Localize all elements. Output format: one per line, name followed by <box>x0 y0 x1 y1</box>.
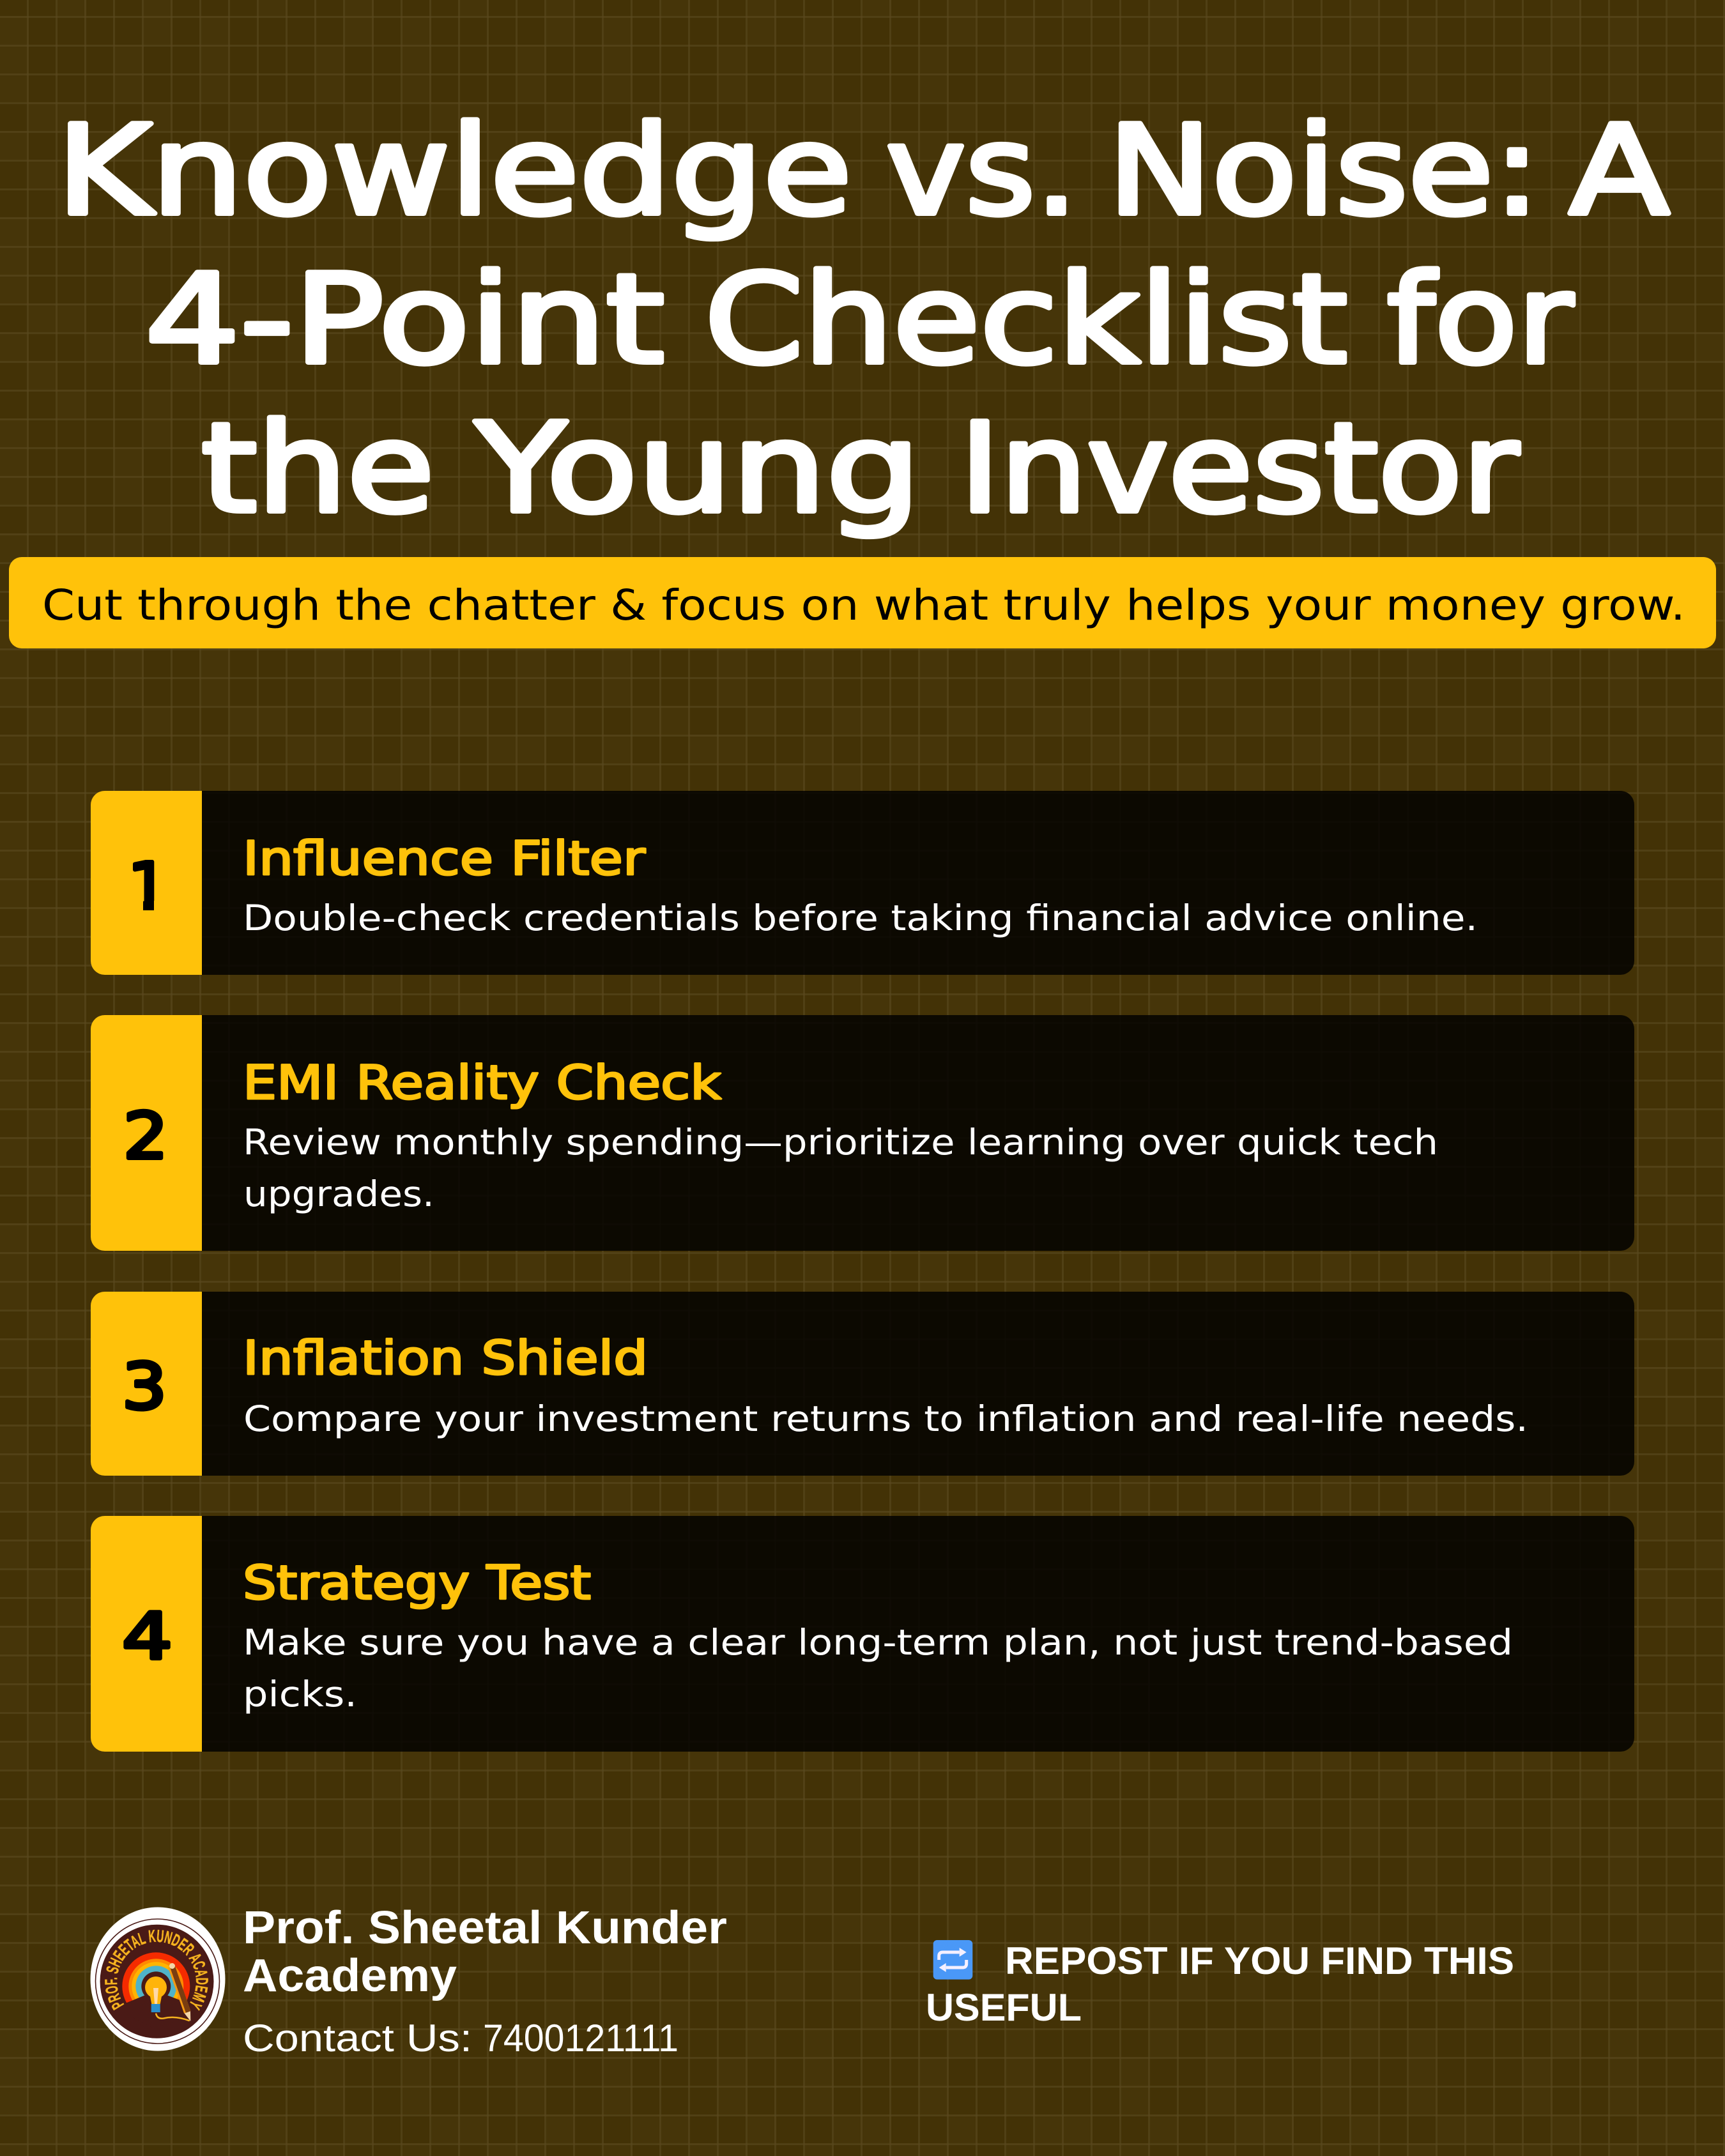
panel: checklist item 3: Compare your investment returns to inflation and real-life needs. <box>243 1398 1528 1439</box>
icon: repost <box>933 1940 972 1980</box>
panel: checklist item 1: 1 <box>128 849 169 924</box>
panel: checklist item 3: 3 <box>122 1349 167 1424</box>
icon: academy logo: PROF. SHEETAL KUNDER ACADEMY <box>105 1929 208 2011</box>
panel: checklist item 2: 2 <box>123 1099 168 1174</box>
panel: checklist item 3 <box>91 1292 1634 1476</box>
title <box>57 99 1669 540</box>
title: Noise: <box>1108 99 1540 243</box>
repost call to action: REPOST IF YOU FIND THIS <box>1005 1939 1514 1982</box>
title: for <box>1387 248 1574 392</box>
icon: academy logo <box>91 1908 225 2051</box>
panel: checklist item 4: Strategy Test <box>243 1556 591 1610</box>
panel: checklist item 2: EMI Reality Check <box>243 1056 722 1110</box>
academy name and contact <box>243 1902 727 2060</box>
panel: checklist item 4: picks. <box>243 1674 357 1715</box>
panel: checklist item 2: Review monthly spending—prioritize learning over quick tech <box>243 1122 1438 1163</box>
academy name and contact: Prof. Sheetal Kunder <box>243 1902 727 1953</box>
panel: checklist item 3: Inflation Shield <box>243 1331 648 1386</box>
academy name and contact: 7400121111 <box>483 2017 678 2060</box>
panel: checklist item 2: upgrades. <box>243 1174 434 1214</box>
title: Young <box>475 397 921 540</box>
title: vs. <box>886 99 1078 243</box>
repost call to action <box>926 1939 1514 2029</box>
panel: checklist item 1 <box>91 791 1634 975</box>
academy name and contact: Contact Us: <box>243 2017 472 2060</box>
title: the <box>201 397 434 540</box>
panel: checklist item 4: Make sure you have a clear long-term plan, not just trend-based <box>243 1622 1513 1663</box>
panel: checklist item 1: Double-check credentials before taking financial advice online. <box>243 898 1478 938</box>
panel: checklist item 4 <box>91 1516 1634 1752</box>
title: Checklist <box>705 248 1347 392</box>
repost call to action: USEFUL <box>926 1986 1082 2029</box>
title: Knowledge <box>57 99 852 243</box>
academy name and contact: Academy <box>243 1950 457 2001</box>
subtitle banner <box>9 557 1716 648</box>
subtitle banner: Cut through the chatter & focus on what truly helps your money grow. <box>42 581 1685 630</box>
title: 4-Point <box>145 248 664 392</box>
title: A <box>1569 99 1669 243</box>
panel: checklist item 1: Influence Filter <box>243 832 646 886</box>
panel: checklist item 4: 4 <box>122 1599 172 1674</box>
title: Investor <box>960 397 1519 540</box>
panel: checklist item 2 <box>91 1015 1634 1251</box>
